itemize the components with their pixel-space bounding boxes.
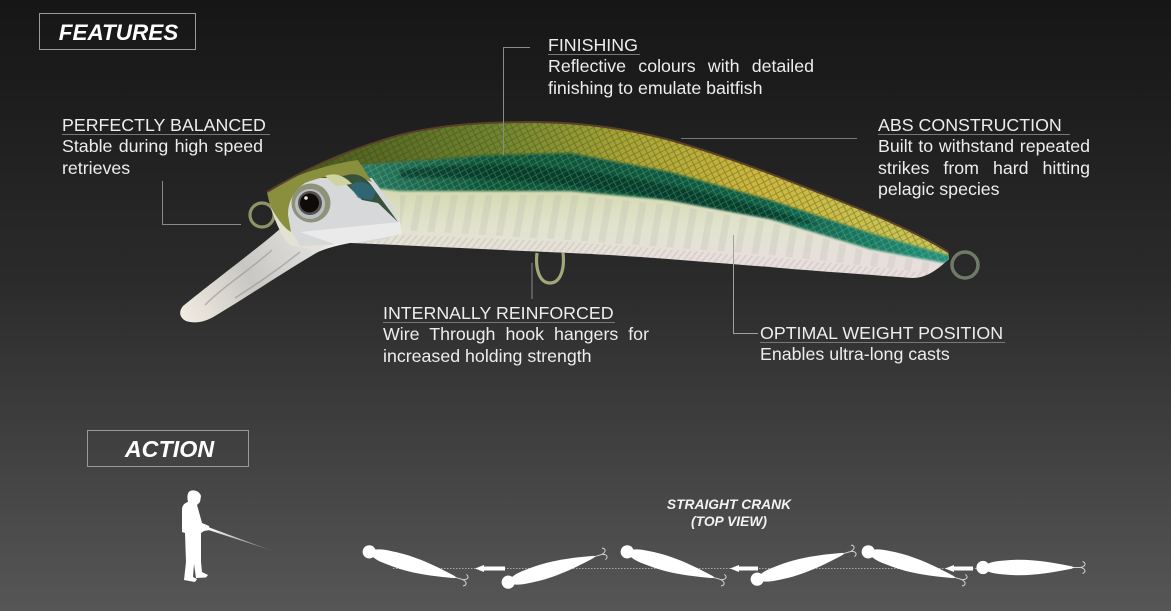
- callout: ABS construction: ABS CONSTRUCTION: [878, 115, 1062, 135]
- lure silhouette 0: [976, 560, 1085, 575]
- heading: features: FEATURES: [59, 20, 178, 45]
- leader line: perfectly balanced: [162, 181, 241, 224]
- head: olive plate: [262, 160, 372, 232]
- arrow 2: [730, 565, 758, 572]
- caption: straight crank: STRAIGHT CRANK: [667, 497, 791, 512]
- callout: ABS construction: [878, 115, 1090, 199]
- icon: lure eye: [292, 184, 330, 222]
- heading: action: [87, 430, 249, 467]
- caption: straight crank: (TOP VIEW): [691, 514, 767, 529]
- icon: front line tie ring: [250, 203, 274, 227]
- callout: finishing: finishing to emulate baitfish: [548, 78, 762, 98]
- callout: perfectly balanced: [62, 115, 270, 178]
- callout: optimal weight position: [760, 323, 1005, 364]
- callout: internally reinforced: [383, 303, 649, 366]
- arrow 3: [945, 565, 973, 572]
- callout: optimal weight position: Enables ultra-long casts: [760, 344, 950, 364]
- caption: straight crank: [667, 497, 792, 529]
- leader line: ABS construction: [681, 138, 857, 140]
- callout: finishing: [548, 35, 814, 98]
- leader line: internally reinforced: [531, 263, 533, 299]
- retrieve line: [393, 568, 980, 570]
- callout: internally reinforced: Wire Through hook hangers for: [383, 324, 649, 344]
- lure silhouette 5: [361, 543, 469, 588]
- lure lip: [180, 228, 350, 322]
- callout: ABS construction: pelagic species: [878, 179, 1000, 199]
- callout: finishing: FINISHING: [548, 35, 638, 55]
- callout: internally reinforced: INTERNALLY REINFORCED: [383, 303, 614, 323]
- icon: tail ring: [952, 252, 978, 278]
- leader line: finishing: [504, 48, 530, 155]
- heading: action: ACTION: [125, 436, 214, 462]
- icon: hook hanger: [537, 253, 563, 283]
- callout: ABS construction: Built to withstand repeated: [878, 136, 1090, 156]
- fishing rod: [207, 527, 273, 551]
- lure top ridge: [267, 122, 948, 252]
- angler silhouette: [182, 490, 273, 582]
- illustration layer: [162, 47, 1086, 589]
- lure silhouette 2: [749, 543, 857, 588]
- lure silhouette 4: [500, 546, 608, 591]
- callout: perfectly balanced: PERFECTLY BALANCED: [62, 115, 266, 135]
- lure silhouette 1: [860, 543, 968, 588]
- arrow 1: [475, 565, 505, 572]
- lure silhouette 3: [619, 543, 727, 588]
- head: silver cheek: [285, 178, 402, 246]
- lure: main illustration: [180, 110, 978, 322]
- lure body: [267, 123, 949, 278]
- callout: perfectly balanced: retrieves: [62, 158, 130, 178]
- leader line: optimal weight position: [734, 235, 758, 334]
- heading: features: [39, 13, 196, 50]
- callout: finishing: Reflective colours with detailed: [548, 56, 814, 76]
- callout: internally reinforced: increased holding strength: [383, 346, 592, 366]
- callout: optimal weight position: OPTIMAL WEIGHT POSITION: [760, 323, 1003, 343]
- callout: ABS construction: strikes from hard hitting: [878, 158, 1090, 178]
- callout: perfectly balanced: Stable during high speed: [62, 136, 263, 156]
